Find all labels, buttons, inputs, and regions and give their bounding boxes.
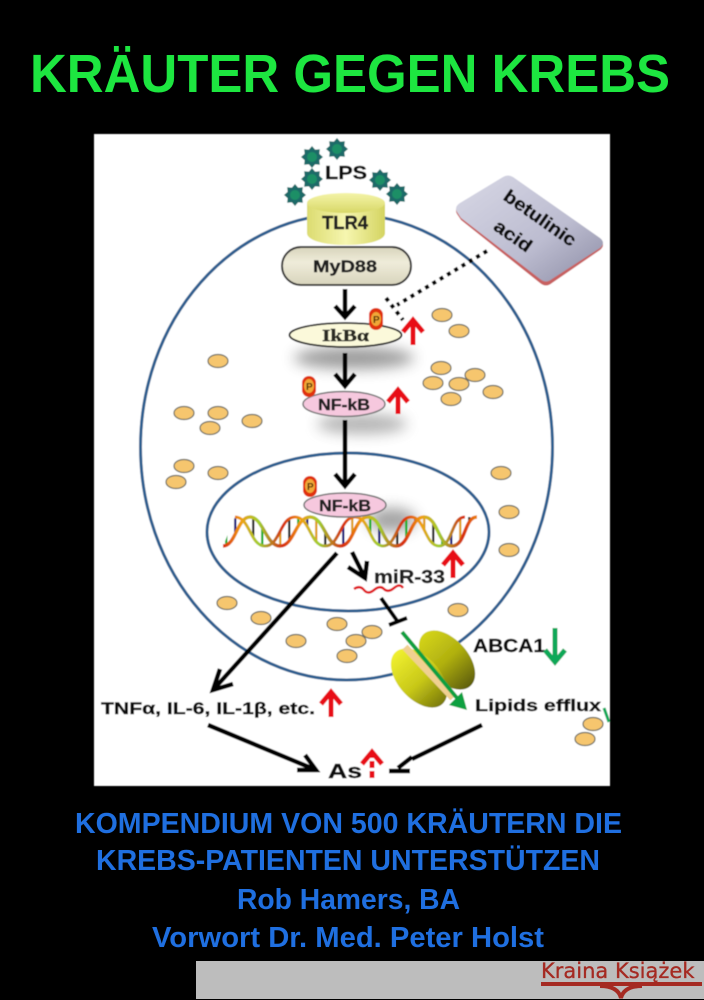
arrow: MyD88 to IkBa [335,289,355,317]
green arrow fragment [604,708,609,722]
phospho badge: P [373,315,380,326]
red up arrow: NF-kB [388,390,408,414]
MyD88 adapter [282,247,411,285]
TLR4 receptor: TLR4 [322,213,368,233]
green down arrow: ABCA1 [545,628,565,662]
DNA helix [223,517,477,546]
shadow by nuclear NF-kB [368,508,416,532]
author: Rob Hamers, BA [237,884,460,916]
lipid droplets [166,308,603,746]
label: miR-33: miR-33 [374,567,445,587]
subtitle line 2: KREBS-PATIENTEN UNTERSTÜTZEN [96,844,600,877]
label: lipids efflux: Lipids efflux [475,696,602,715]
inhibition bar [381,598,407,625]
label: LPS: LPS [325,163,367,183]
shadow under IkBa [294,347,414,369]
miRNA squiggle [354,586,403,592]
foreword credit: Vorwort Dr. Med. Peter Holst [152,922,544,954]
red up arrow: miR-33 [443,553,463,578]
label: cytokines: TNFα, IL-6, IL-1β, etc. [101,699,315,718]
red up arrow: IkBa [403,320,423,345]
arrow: lipids to atherosclerosis [389,725,482,771]
outer cell membrane [140,214,552,680]
IkBa protein: IkBα [322,326,370,345]
nucleus membrane [207,453,489,611]
subtitle line 1: KOMPENDIUM VON 500 KRÄUTERN DIE [75,807,622,840]
IkBa protein [290,323,402,347]
publisher strip [196,959,704,999]
title: KRÄUTER GEGEN KREBS [30,44,670,104]
arrow: DNA to miR-33 [348,552,367,578]
NF-kB nucleus [304,493,386,517]
icon: LPS molecules [284,138,408,206]
red dashed arrow [362,752,382,778]
arrow: cytokines to atherosclerosis [208,725,316,770]
shadow under NF-kB [317,414,407,434]
phospho badge: P [306,382,313,393]
TLR4 receptor [307,193,385,245]
MyD88 adapter: MyD88 [313,257,377,276]
NF-kB cytoplasm: NF-kB [318,397,370,414]
phospho badge [302,376,316,397]
NF-kB cytoplasm [303,392,385,416]
phospho badge [303,476,317,497]
betulinic acid box [456,176,603,286]
arrow: NF-kB into nucleus [335,420,355,486]
NF-kB nucleus: NF-kB [319,498,371,515]
dotted inhibition line [386,251,487,320]
betulinic acid box: betulinic [500,186,580,250]
phospho badge [369,308,383,330]
publisher strip: Kraina Książek [541,959,695,983]
panel: pathway diagram [94,134,610,786]
arrow: DNA to cytokines [213,553,337,690]
red up arrow: cytokines [321,692,341,717]
label: As: As [328,761,362,783]
betulinic acid box: acid [490,216,536,256]
arrow: IkBa to NF-kB [335,353,355,386]
label: ABCA1: ABCA1 [473,636,545,656]
ABCA1 transporter [380,620,486,718]
phospho badge: P [307,482,314,493]
